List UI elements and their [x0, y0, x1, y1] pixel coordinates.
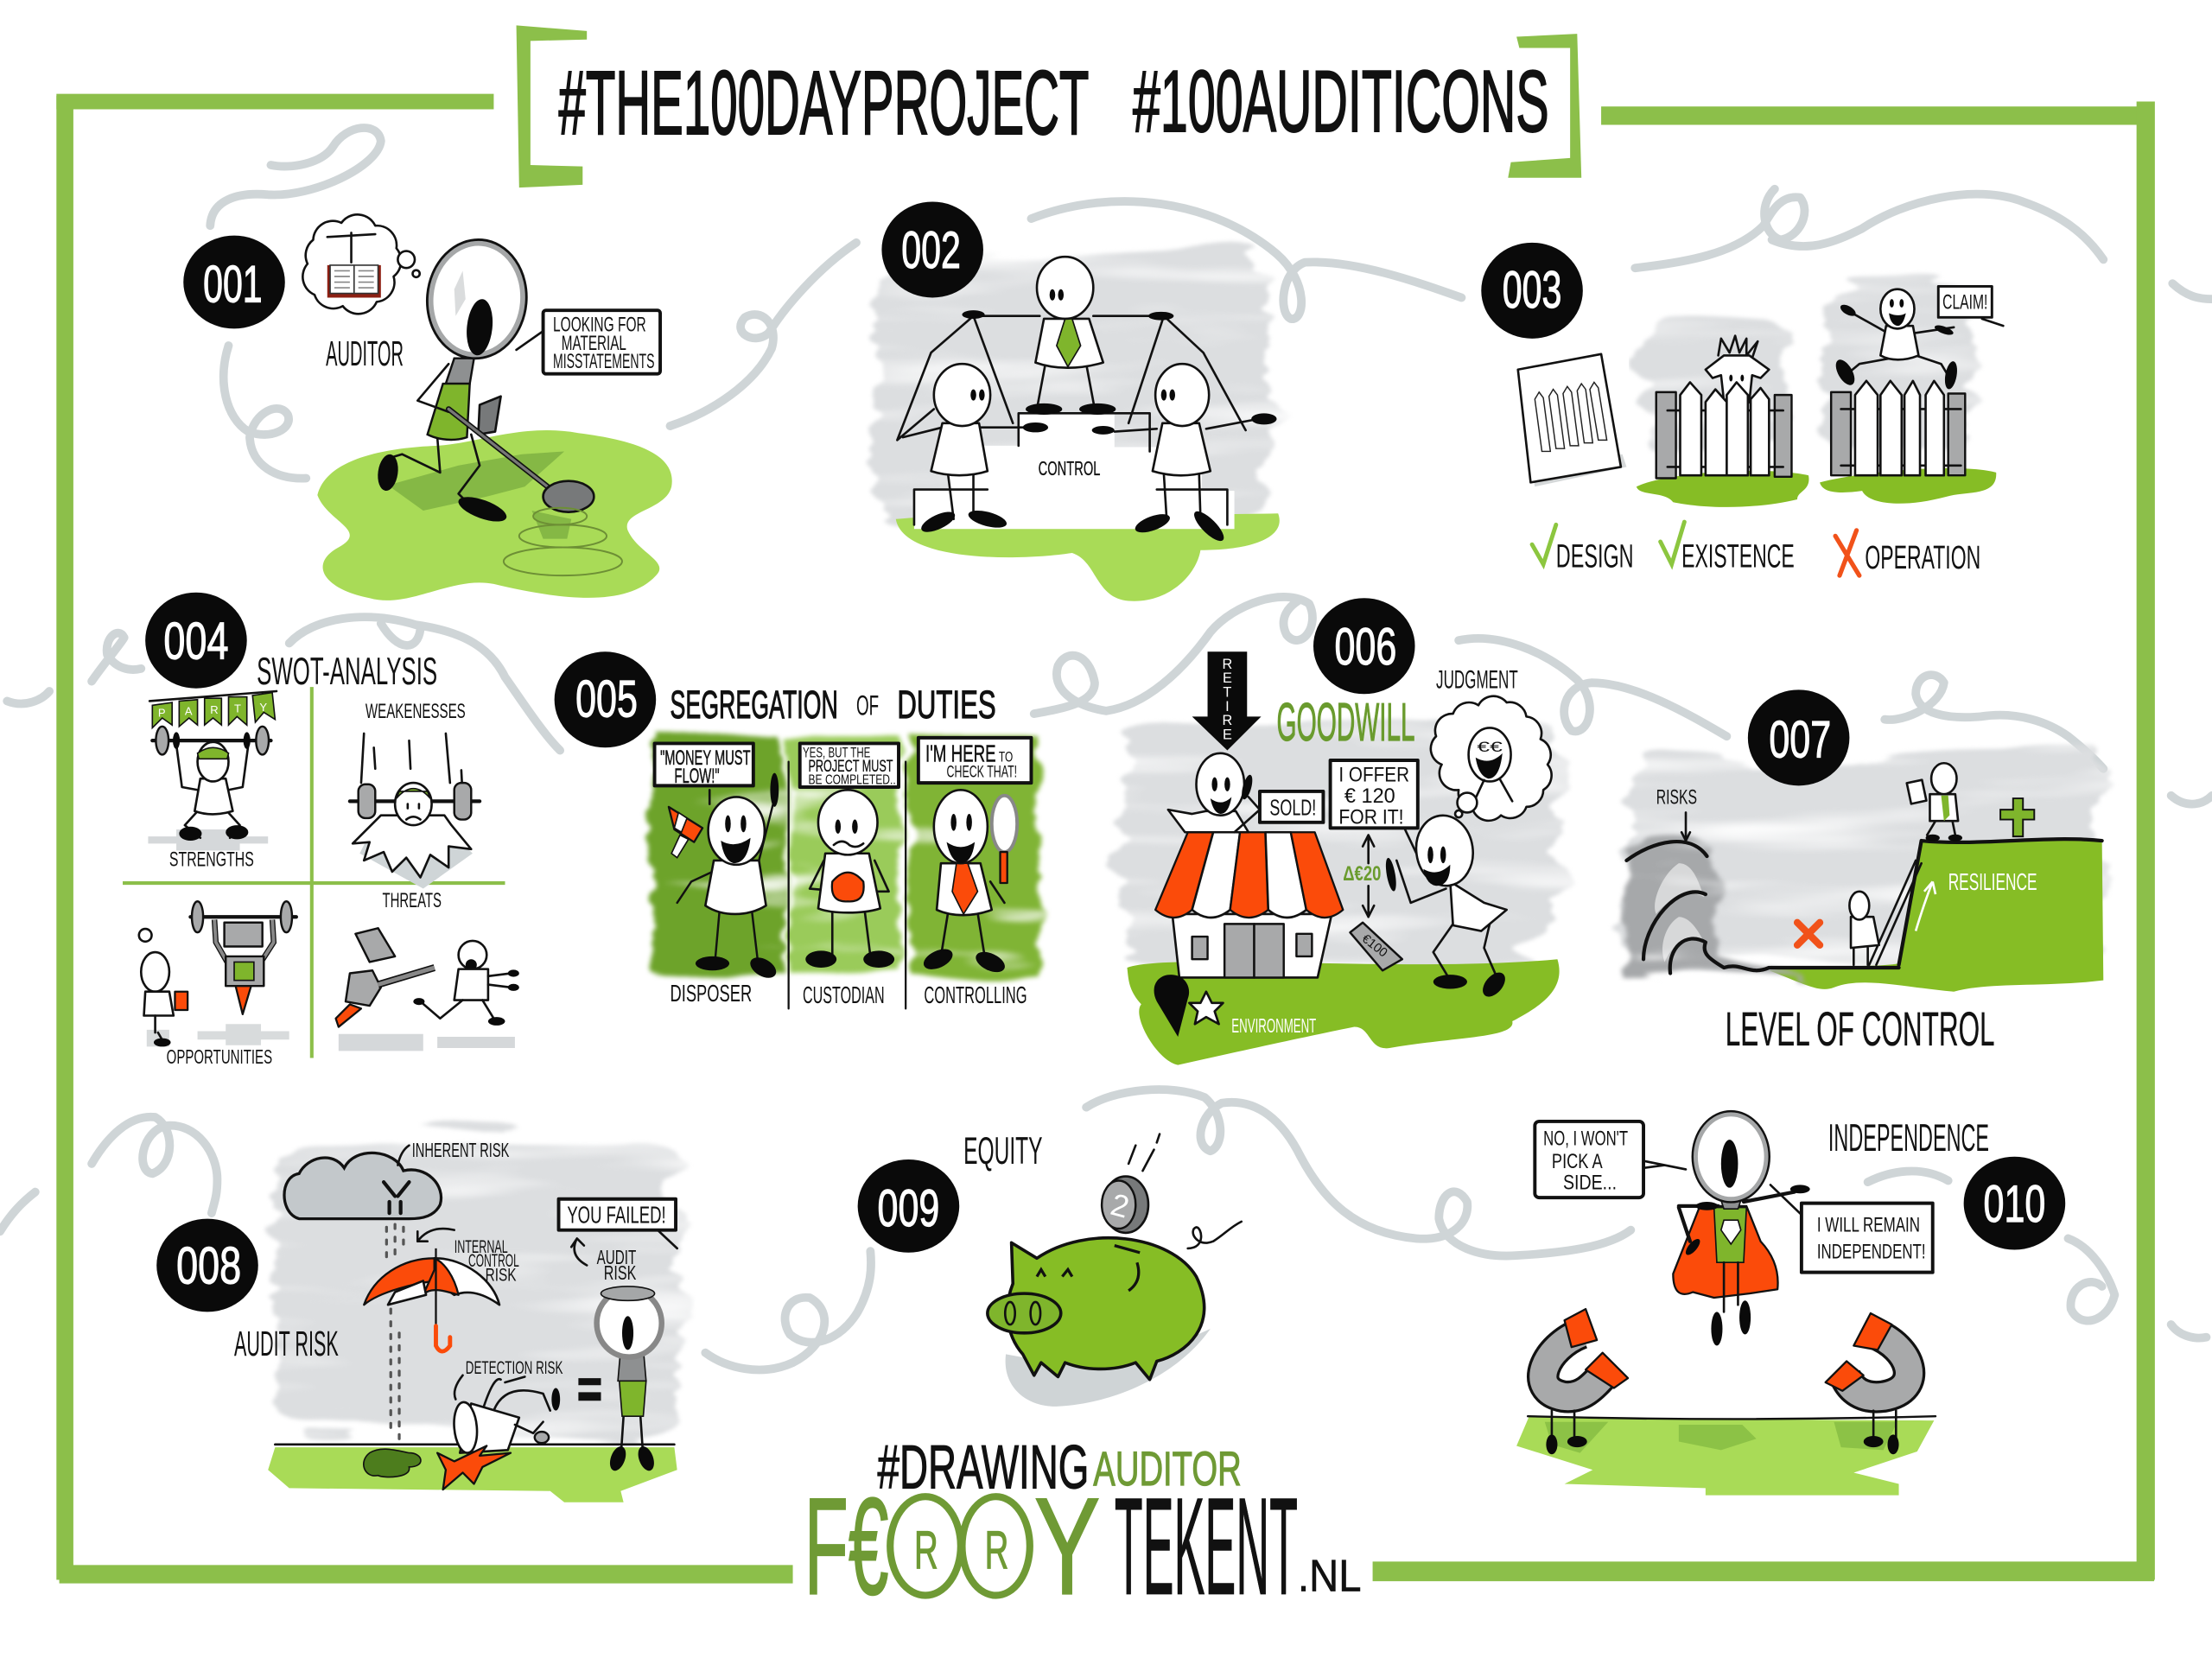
ground shadows [1545, 1422, 1897, 1453]
threats quadrant [336, 889, 519, 1051]
label audit risk: AUDIT RISK [234, 1324, 339, 1363]
label audit risk small: RISK [604, 1261, 636, 1284]
metal-detector ripples [504, 508, 622, 575]
panel 003: design, existence, operation [1481, 243, 2003, 575]
ground shadows [388, 451, 571, 539]
waves [1626, 840, 1813, 979]
ferry logotype: R [914, 1521, 938, 1580]
platform steps [914, 413, 1227, 524]
heading level of control: LEVEL OF CONTROL [1726, 1002, 1995, 1056]
check and label existence: EXISTENCE [1681, 537, 1795, 574]
coin [1102, 1134, 1160, 1233]
column labels: DISPOSER [671, 980, 752, 1007]
green ground [268, 1447, 677, 1502]
disposer figure [655, 743, 779, 982]
opportunities quadrant [139, 901, 296, 1068]
thought cloud with book and scales [302, 214, 420, 314]
label independence: INDEPENDENCE [1828, 1117, 1989, 1159]
auditor figure with magnifying-glass head [376, 236, 594, 526]
title bracket right [1508, 34, 1581, 178]
badge 003 [1481, 243, 1583, 339]
badge 006 [1313, 598, 1415, 694]
label audit risk small: AUDIT [597, 1246, 636, 1268]
price tag [1350, 923, 1402, 970]
equals sign [578, 1378, 601, 1401]
title: #THE100DAYPROJECT [559, 53, 1089, 154]
panel 001: auditor [183, 214, 672, 600]
badge 005 [555, 651, 656, 747]
fence with jumping figure [1831, 289, 1965, 475]
panel 009: equity [858, 1130, 1242, 1407]
label audit risk small [571, 1238, 636, 1284]
label control: CONTROL [1039, 457, 1100, 480]
panel 005: segregation of duties [555, 651, 1039, 1008]
green ground fence 2 [1820, 468, 1996, 504]
green ground fence 1 [1637, 471, 1808, 507]
offer sign: FOR IT! [1338, 805, 1403, 829]
strengths quadrant [148, 691, 276, 871]
red cross [1797, 923, 1820, 945]
strengths quadrant: A [185, 705, 193, 718]
green ground [317, 430, 672, 600]
opportunities quadrant: OPPORTUNITIES [167, 1045, 272, 1068]
claim speech box: CLAIM! [1942, 291, 1987, 314]
badge 004 [145, 593, 247, 689]
custodian figure: YES, BUT THE [803, 746, 870, 761]
ferry logotype: F€ [804, 1469, 889, 1623]
no side box [1535, 1121, 1686, 1197]
ferry logotype: R [985, 1521, 1008, 1580]
thought cloud: €€ [1477, 740, 1503, 755]
badge 008 [156, 1219, 258, 1312]
panel 004: SWOT analysis [123, 593, 519, 1068]
speech box [517, 310, 660, 374]
label internal control risk: RISK [486, 1265, 517, 1285]
controlling figure: TO [999, 750, 1013, 765]
heading: SEGREGATION [671, 683, 838, 727]
badge 007: 007 [1769, 710, 1831, 769]
strengths quadrant: STRENGTHS [169, 848, 254, 871]
badge 001: 001 [203, 254, 263, 313]
independent box [1770, 1185, 1933, 1273]
badge 010: 010 [1984, 1174, 2045, 1233]
delta arrow: Δ€20 [1343, 862, 1381, 886]
retire arrow: E [1223, 670, 1232, 686]
heading: SWOT-ANALYSIS [257, 651, 437, 693]
strengths quadrant: Y [259, 701, 267, 714]
label environment: ENVIRONMENT [1231, 1014, 1316, 1037]
grey wash fence 2 [1827, 285, 1974, 451]
sold sign: SOLD! [1269, 795, 1316, 821]
ground line [275, 1444, 674, 1445]
hashtag drawing: #DRAWING [878, 1432, 1089, 1502]
badge 008: 008 [176, 1236, 241, 1295]
you failed box [559, 1199, 677, 1248]
disposer figure: FLOW!" [674, 765, 720, 788]
column labels: CONTROLLING [924, 981, 1027, 1008]
strengths quadrant: R [210, 703, 219, 716]
panel 007: level of control [1626, 689, 2103, 1056]
column dividers [789, 762, 906, 1008]
controlling figure [918, 738, 1031, 976]
label judgment: JUDGMENT [1436, 666, 1518, 695]
green ground [1516, 1416, 1934, 1496]
buyer figure [1384, 812, 1510, 1001]
badge 004: 004 [163, 611, 228, 670]
label detection risk [454, 1358, 563, 1400]
auditor with glass head [597, 1286, 662, 1473]
label internal control risk: CONTROL [468, 1251, 519, 1271]
background squiggles [0, 128, 2212, 1369]
badge 009: 009 [878, 1178, 939, 1237]
price tag: €100 [1359, 932, 1389, 960]
column labels: CUSTODIAN [803, 981, 885, 1008]
ferry logotype: Y [1034, 1469, 1100, 1623]
controlling figure: CHECK THAT! [947, 763, 1017, 782]
fence with goat [1656, 336, 1791, 478]
green cliff and ground [1769, 839, 2103, 992]
auditor on top [1907, 763, 1962, 842]
star environment [1189, 992, 1224, 1024]
strengths quadrant: T [234, 702, 241, 715]
tekent nl [1115, 1469, 1362, 1623]
title: #100AUDITICONS [1133, 53, 1549, 150]
column labels [671, 980, 1027, 1008]
custodian figure: BE COMPLETED.. [809, 773, 896, 788]
label internal control risk: INTERNAL [454, 1237, 508, 1257]
label resilience [1916, 868, 2037, 931]
shop [1155, 832, 1343, 977]
footer logo [804, 1432, 1362, 1623]
disposer figure: "MONEY MUST [660, 746, 751, 770]
badge 003: 003 [1503, 260, 1561, 319]
climber [1849, 861, 1922, 965]
green ground [1127, 959, 1560, 1065]
green puddle [364, 1449, 421, 1477]
cliff line [1770, 839, 2102, 968]
grey wash [1122, 720, 1559, 974]
pig shadow [1006, 1329, 1211, 1407]
rain drops [386, 1224, 404, 1439]
label equity: EQUITY [963, 1130, 1043, 1172]
umbrella [364, 1248, 499, 1351]
quadrant lines [123, 687, 505, 1058]
badge 007 [1748, 689, 1849, 785]
badge 001 [183, 236, 285, 328]
threats quadrant: THREATS [382, 889, 442, 912]
offer sign: I OFFER [1338, 763, 1409, 786]
no side box: PICK A [1552, 1150, 1603, 1173]
title bracket left [517, 25, 587, 187]
check and label design [1532, 524, 1634, 574]
badge 010 [1964, 1157, 2065, 1250]
label risks: RISKS [1656, 786, 1697, 810]
red splash [437, 1445, 511, 1490]
green plus [2000, 798, 2034, 836]
delta arrow [1343, 835, 1381, 917]
right figure [1092, 364, 1277, 545]
speech box: LOOKING FOR [553, 314, 646, 337]
seller figure on roof [1168, 753, 1260, 832]
hashtag auditor: AUDITOR [1093, 1442, 1242, 1496]
grey wash fence 1 [1643, 317, 1790, 459]
green wash columns [653, 734, 1039, 976]
claim speech box [1938, 286, 2003, 326]
ground line [1528, 1416, 1936, 1419]
cross and label operation: OPERATION [1865, 539, 1980, 575]
check and label design: DESIGN [1556, 537, 1634, 574]
ferry logotype [804, 1469, 1100, 1623]
label resilience: RESILIENCE [1948, 868, 2037, 895]
heading: DUTIES [897, 683, 996, 727]
cross and label operation [1835, 530, 1980, 575]
coin: 2 [1107, 1186, 1133, 1225]
retire arrow [1192, 651, 1262, 751]
badge 009 [858, 1159, 959, 1253]
badge 005: 005 [575, 669, 638, 727]
label inherent risk [397, 1139, 509, 1166]
document with fence drawing [1518, 354, 1626, 486]
strengths quadrant: P [158, 706, 166, 719]
panel 001: auditor: AUDITOR [326, 334, 404, 373]
green ground [896, 513, 1280, 601]
label risks [1656, 786, 1697, 841]
badge 002 [881, 201, 983, 297]
crashed auditor [452, 1376, 560, 1454]
retire arrow: R [1223, 657, 1233, 672]
control platform [914, 413, 1235, 529]
left figure [903, 364, 1048, 536]
speech box: MATERIAL [562, 332, 626, 355]
custodian figure [800, 743, 899, 968]
offer sign: € 120 [1344, 785, 1395, 808]
right magnet [1826, 1313, 1910, 1454]
panel 002: control [874, 201, 1280, 601]
sold sign [1260, 791, 1323, 823]
badge 006: 006 [1334, 617, 1396, 676]
text: TEKENT [1115, 1469, 1298, 1623]
label inherent risk: INHERENT RISK [412, 1139, 509, 1161]
independent box: INDEPENDENT! [1817, 1240, 1926, 1263]
weaknesses quadrant: WEAKENESSES [365, 700, 466, 723]
top figure with green tie [897, 257, 1246, 440]
no side box: SIDE... [1563, 1171, 1617, 1194]
label internal control risk [417, 1229, 519, 1285]
left magnet [1543, 1309, 1628, 1454]
speech box: MISSTATEMENTS [553, 350, 655, 373]
offer sign [1331, 760, 1418, 856]
panel 010: independence [1516, 1112, 2065, 1496]
check and label existence [1661, 522, 1795, 574]
grey wash [874, 254, 1269, 529]
piggy bank [988, 1222, 1242, 1380]
retire arrow: R [1223, 713, 1233, 728]
hero auditor [1673, 1112, 1810, 1346]
tekent nl: .NL [1298, 1552, 1362, 1602]
custodian figure: PROJECT MUST [809, 757, 893, 776]
heading: OF [856, 689, 879, 721]
you failed box: YOU FAILED! [567, 1201, 666, 1228]
label detection risk: DETECTION RISK [466, 1358, 563, 1378]
location pin [1154, 975, 1189, 1037]
badge 002: 002 [901, 220, 961, 279]
panel 006: goodwill: GOODWILL [1277, 693, 1415, 753]
retire arrow: E [1223, 727, 1232, 743]
panel 006: goodwill [1122, 598, 1560, 1065]
storm cloud [284, 1153, 442, 1219]
independent box: I WILL REMAIN [1817, 1213, 1920, 1236]
weaknesses quadrant [350, 700, 480, 889]
grey wash [275, 1135, 677, 1439]
retire arrow: I [1225, 699, 1230, 715]
panel 008: audit risk [156, 1135, 677, 1502]
no side box: NO, I WON'T [1543, 1128, 1628, 1151]
controlling figure: I'M HERE [925, 740, 996, 767]
thought cloud [1431, 696, 1552, 821]
grey wash [1630, 751, 2102, 969]
retire arrow: T [1223, 685, 1231, 701]
